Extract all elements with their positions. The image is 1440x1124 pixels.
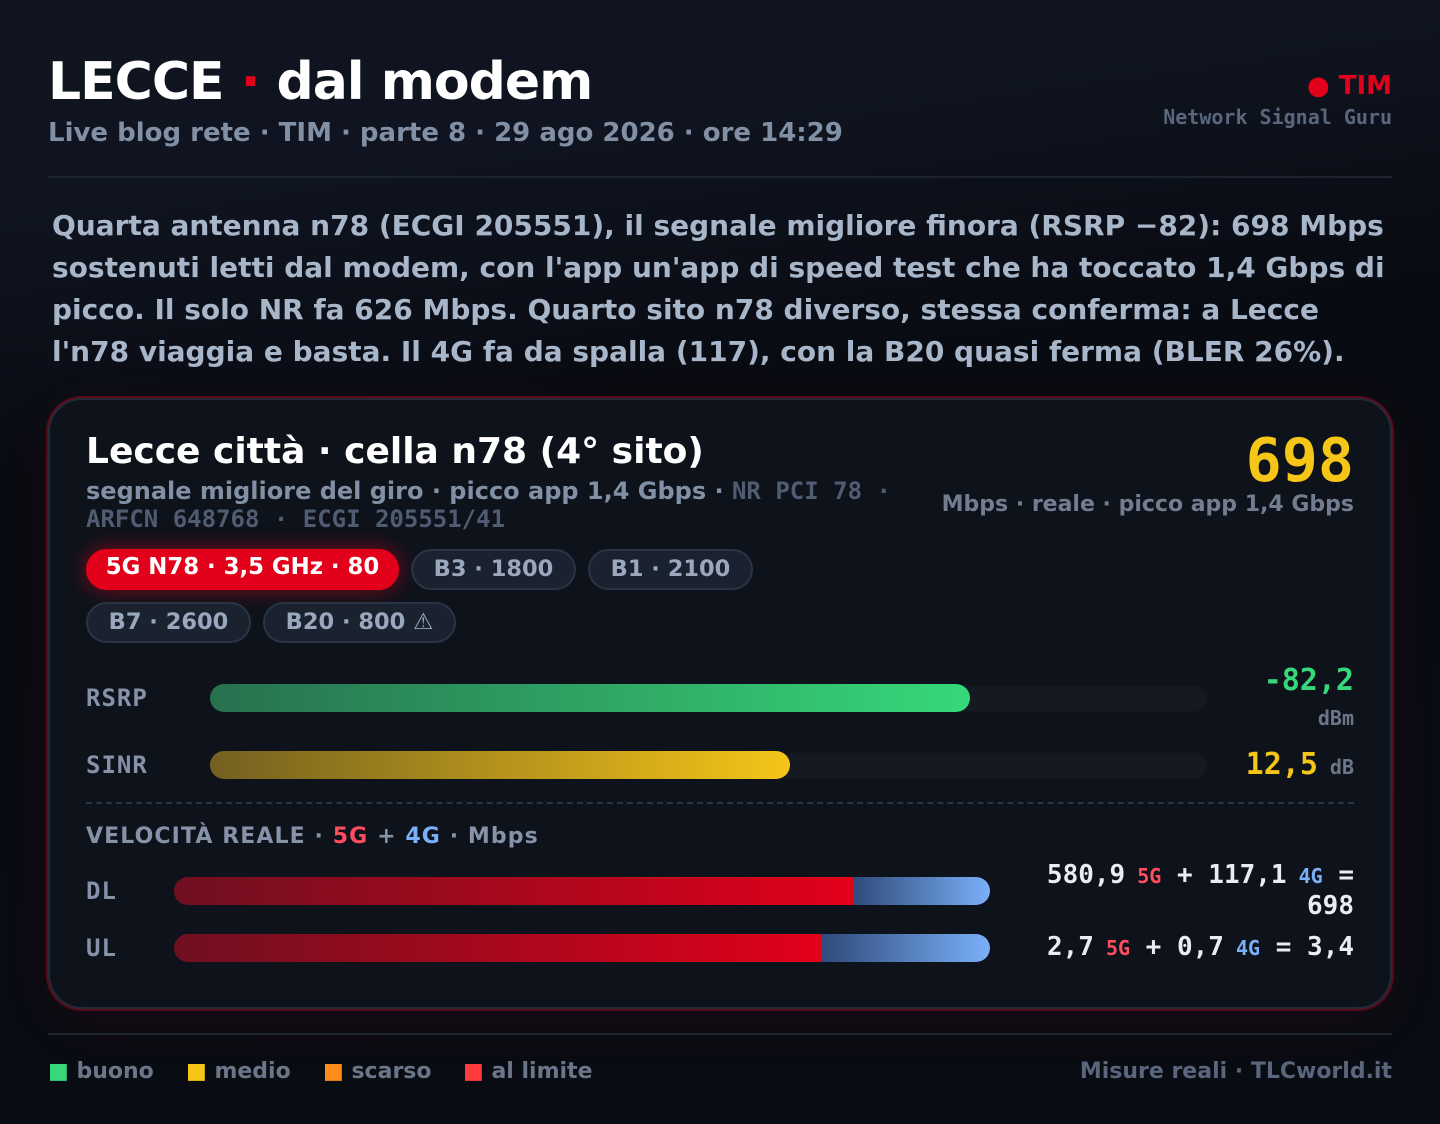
headline caption: Mbps · reale · picco app 1,4 Gbps [942, 492, 1354, 517]
RSRP value: -82,2 [1264, 663, 1354, 698]
source credit: Misure reali · TLCworld.it [1080, 1059, 1392, 1084]
UL values: 2,7 5G + 0,7 4G = 3,4 [1047, 932, 1354, 962]
headline value: 698 [1246, 426, 1354, 496]
legend: scarso: ■ scarso [323, 1059, 432, 1084]
card subtitle: segnale migliore del giro · picco app 1,4 Gbps · NR PCI 78 · [86, 477, 891, 505]
pill: B1: B1 · 2100 [611, 556, 730, 582]
band pills [74, 535, 753, 643]
RSRP label: RSRP [86, 684, 148, 712]
SINR bar [210, 751, 790, 779]
panel: cell card [48, 398, 1392, 1009]
RSRP unit: dBm [1318, 706, 1354, 730]
header subtitle: Live blog rete · TIM · parte 8 · 29 ago 2026 · ore 14:29 [48, 118, 843, 148]
card identifiers: ARFCN 648768 · ECGI 205551/41 [86, 505, 505, 533]
intro paragraph: Quarta antenna n78 (ECGI 205551), il segnale migliore finora (RSRP −82): 698 Mbps [52, 209, 1384, 242]
DL values: 580,9 5G + 117,1 4G = 698 [1047, 860, 1354, 921]
legend: buono: ■ buono [48, 1059, 154, 1084]
brand subtitle: Network Signal Guru [1163, 105, 1392, 129]
UL stacked bar [174, 934, 990, 962]
pill: B7: B7 · 2600 [109, 609, 228, 635]
DL stacked bar [174, 877, 990, 905]
DL label: DL [86, 877, 117, 905]
card title: Lecce città · cella n78 (4° sito) [86, 431, 704, 472]
operator brand: ● TIM [1307, 71, 1392, 101]
legend: medio: ■ medio [186, 1059, 291, 1084]
pill: B3: B3 · 1800 [434, 556, 553, 582]
speed heading: VELOCITÀ REALE · 5G + 4G · Mbps [86, 824, 539, 849]
pill: B3 [411, 549, 576, 590]
pill: n78: 5G N78 · 3,5 GHz · 80 [106, 554, 379, 580]
pill: B7 [86, 602, 251, 643]
SINR label: SINR [86, 751, 148, 779]
legend: al limite: ■ al limite [463, 1059, 592, 1084]
RSRP bar [210, 684, 970, 712]
legend [48, 1059, 592, 1084]
intro paragraph [52, 209, 1385, 368]
intro paragraph: sostenuti letti dal modem, con l'app un'app di speed test che ha toccato 1,4 Gbps di [52, 251, 1385, 284]
header title: LECCE · dal modem [48, 52, 592, 112]
pill: B20 [263, 602, 456, 643]
SINR value: 12,5 dB [1246, 747, 1354, 782]
UL label: UL [86, 934, 117, 962]
intro paragraph: picco. Il solo NR fa 626 Mbps. Quarto sito n78 diverso, stessa conferma: a Lecce [52, 293, 1319, 326]
pill: B1 [588, 549, 753, 590]
pill: n78 [86, 549, 399, 590]
intro paragraph: l'n78 viaggia e basta. Il 4G fa da spalla (117), con la B20 quasi ferma (BLER 26%). [52, 335, 1345, 368]
pill: B20: B20 · 800 ⚠ [286, 609, 433, 635]
